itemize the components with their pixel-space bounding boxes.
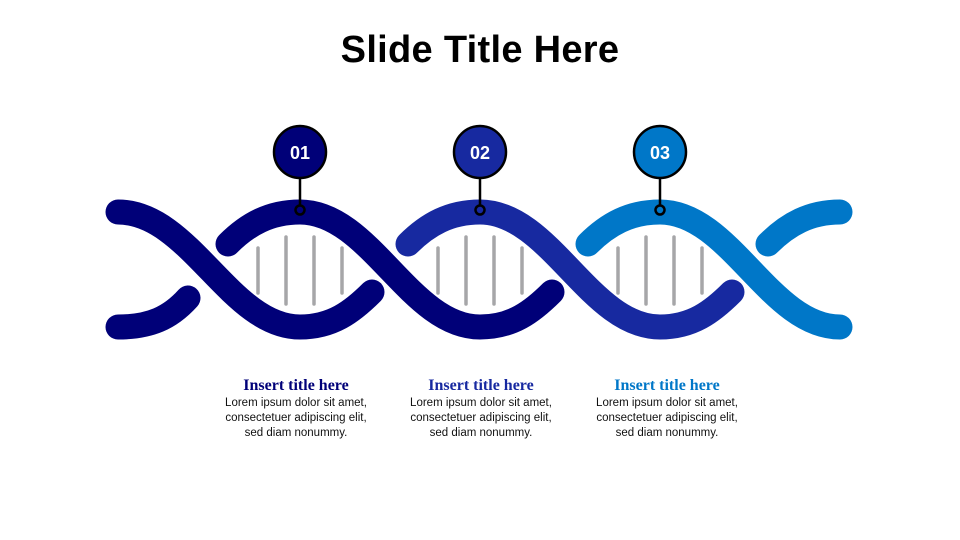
text block 2 — [410, 377, 552, 439]
title: Slide Title Here — [341, 29, 619, 71]
text block 3: consectetuer adipiscing elit, — [596, 412, 738, 424]
text block 2: Insert title here — [428, 377, 534, 394]
text block 2: consectetuer adipiscing elit, — [410, 412, 552, 424]
text block 1 — [225, 377, 367, 439]
text block 1: sed diam nonummy. — [245, 427, 347, 439]
rungs — [258, 237, 702, 304]
strand segment 3 — [588, 212, 840, 327]
strand segment 1 — [118, 212, 552, 327]
marker 02 — [454, 126, 506, 214]
marker 02: 02 — [470, 143, 490, 163]
strand segment 2 — [408, 212, 732, 327]
text block 1: Insert title here — [243, 377, 349, 394]
text block 3: sed diam nonummy. — [616, 427, 718, 439]
marker 03: 03 — [650, 143, 670, 163]
marker 01 — [274, 126, 326, 214]
text block 3: Lorem ipsum dolor sit amet, — [596, 397, 738, 409]
text block 2: Lorem ipsum dolor sit amet, — [410, 397, 552, 409]
text block 2: sed diam nonummy. — [430, 427, 532, 439]
marker 01: 01 — [290, 143, 310, 163]
text block 3 — [596, 377, 738, 439]
marker 03 — [634, 126, 686, 214]
text block 1: consectetuer adipiscing elit, — [225, 412, 367, 424]
text block 1: Lorem ipsum dolor sit amet, — [225, 397, 367, 409]
text block 3: Insert title here — [614, 377, 720, 394]
